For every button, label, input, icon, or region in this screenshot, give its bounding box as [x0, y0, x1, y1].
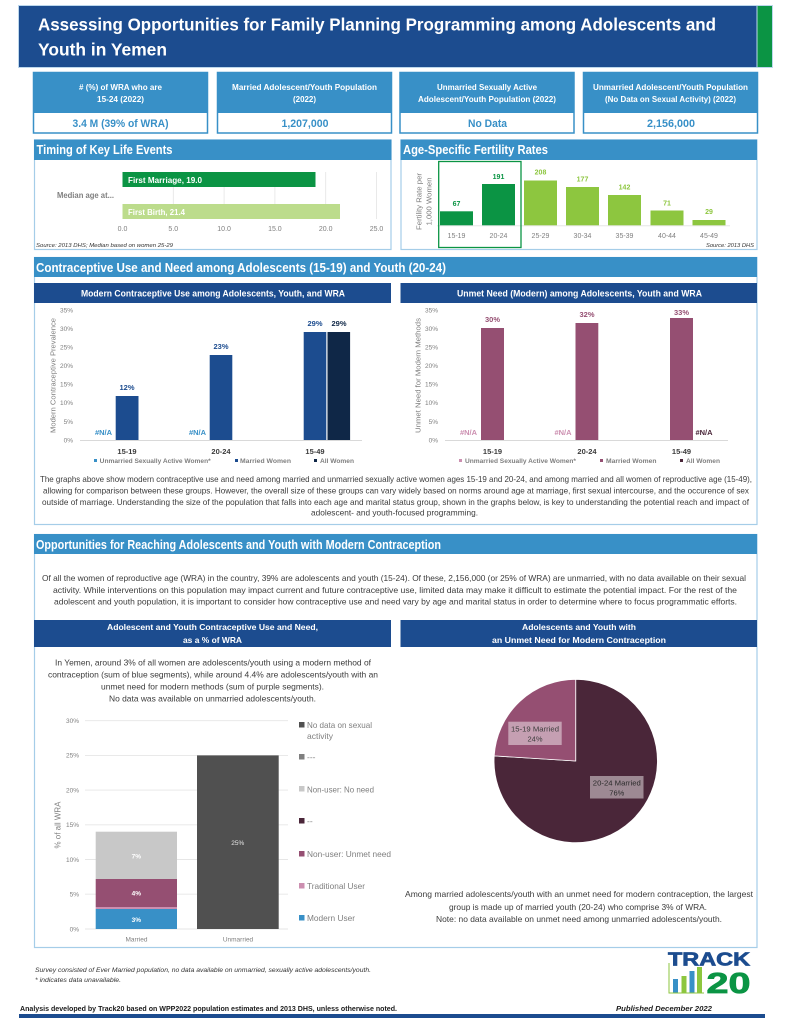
- stat card: unmarried sexually active population: [400, 72, 574, 133]
- bar chart: median ages: 25.0: [370, 226, 383, 233]
- bar chart: unmet need: 15-49: [672, 447, 691, 456]
- pie chart: unmet need by group: 15-19 Married: [511, 724, 559, 734]
- subheading: use and need as share of WRA: [34, 620, 391, 647]
- pie chart: unmet need by group: 20-24 Married: [593, 778, 641, 788]
- heading: opportunities: Opportunities for Reaching Adolescents and Youth with Modern Contraception: [36, 538, 441, 552]
- stat card: married population: (2022): [293, 95, 316, 104]
- stat card: WRA 15-24: 3.4 M (39% of WRA): [72, 118, 169, 130]
- text block: opportunities summary: activity. While interventions on this population may impact current and future contraceptive use, limited data may make it difficult to estimate the potential impact. For the rest of the: [53, 585, 737, 595]
- bar chart: unmet need: Unmet Need for Modern Methods: [414, 318, 422, 433]
- bar chart: modern contraceptive use: 5%: [64, 419, 73, 426]
- subheading: modern contraceptive use: [34, 283, 391, 303]
- stat card: WRA 15-24: [34, 72, 208, 133]
- bar chart: median ages: 15.0: [268, 226, 282, 233]
- bar chart: modern contraceptive use: 20%: [60, 363, 73, 370]
- stacked bar chart: share of WRA: 0%: [70, 926, 79, 933]
- bar chart: unmet need: 30%: [425, 326, 438, 333]
- legend: unmet need: Married Women: [606, 458, 657, 465]
- bar chart: modern contraceptive use: 10%: [60, 400, 73, 407]
- footer bar: [19, 1014, 765, 1018]
- text block: opportunities summary: adolescent and youth population, it is important to consider how contraceptive use and need vary by age and marital status in order to determine where to focus programmatic efforts.: [54, 596, 737, 606]
- stat card: unmarried population: [584, 72, 758, 133]
- bar chart: fertility rates: 208: [535, 170, 546, 176]
- title banner: Assessing Opportunities for Family Planning Programming among Adolescents and: [38, 14, 716, 34]
- bar chart: modern contraceptive use: 15-49: [305, 447, 325, 456]
- heading: age-specific fertility rates: Age-Specific Fertility Rates: [403, 143, 548, 157]
- legend: modern contraceptive use: Married Women: [240, 458, 291, 465]
- legend: modern contraceptive use: All Women: [320, 458, 354, 465]
- subheading: use and need as share of WRA: Adolescent and Youth Contraceptive Use and Need,: [107, 622, 318, 632]
- stat card: unmarried population: Unmarried Adolescent/Youth Population: [593, 83, 748, 92]
- subheading: unmet need groups: [400, 620, 757, 647]
- text block: stacked chart summary: No data was available on unmarried adolescents/youth.: [109, 694, 316, 704]
- source note: Source: 2013 DHS; Median based on women 25-29: [36, 243, 173, 249]
- logo: Track20: TRACK: [668, 950, 750, 970]
- text block: pie chart summary: [405, 889, 754, 924]
- stat card: unmarried population: 2,156,000: [647, 118, 695, 130]
- text block: stacked chart summary: unmet need for modern methods (sum of purple segments).: [101, 682, 324, 692]
- bar chart: fertility rates: 29: [705, 209, 713, 216]
- stat card: WRA 15-24: # (%) of WRA who are: [79, 83, 163, 92]
- bar chart: modern contraceptive use: 29%: [307, 319, 323, 328]
- bar chart: unmet need: 35%: [425, 308, 438, 314]
- bar chart: unmet need: #N/A: [554, 428, 572, 437]
- bar chart: fertility rates: 40-44: [658, 233, 676, 240]
- bar chart: fertility rates: Fertility Rate per: [414, 172, 424, 230]
- subheading: unmet need: [400, 283, 757, 303]
- stat card: unmarried sexually active population: Adolescent/Youth Population (2022): [418, 95, 556, 104]
- bar chart: fertility rates: 25-29: [532, 233, 550, 240]
- bar chart: modern contraceptive use: #N/A: [189, 428, 207, 437]
- heading: contraceptive use and need: Contraceptive Use and Need among Adolescents (15-19) and Youth (20-24): [36, 261, 446, 275]
- bar chart: modern contraceptive use: 15%: [60, 382, 73, 388]
- bar chart: modern contraceptive use: 20-24: [211, 447, 231, 456]
- bar chart: fertility rates: [414, 170, 730, 240]
- stat card: unmarried sexually active population: Unmarried Sexually Active: [437, 83, 538, 92]
- bar chart: modern contraceptive use: 35%: [60, 308, 73, 314]
- bar chart: median ages: 20.0: [319, 226, 333, 233]
- stat card: WRA 15-24: 15-24 (2022): [97, 95, 144, 104]
- legend: unmet need: [459, 458, 720, 465]
- pie chart: unmet need by group: 24%: [527, 734, 543, 744]
- bar chart: unmet need: 5%: [429, 419, 438, 426]
- bar chart: fertility rates: 45-49: [700, 233, 718, 240]
- bar chart: unmet need: #N/A: [460, 428, 478, 437]
- legend: unmet need: All Women: [686, 458, 720, 465]
- legend: stacked chart: --: [307, 816, 313, 826]
- panel: contraceptive use and need: [34, 257, 757, 524]
- bar chart: median ages: 10.0: [217, 226, 231, 233]
- bar chart: modern contraceptive use: 12%: [119, 383, 135, 392]
- footnotes: Survey consisted of Ever Married population, no data available on unmarried, sexually active adolescents/youth.: [35, 967, 371, 974]
- text block: graph explanation: allowing for comparison between these groups. However, the overall size of these groups can vary widely based on norms around age at marriage, first sexual intercourse, and the occurence of sex: [43, 486, 750, 496]
- subheading: use and need as share of WRA: as a % of WRA: [183, 635, 242, 645]
- logo: Track20: [668, 950, 750, 1000]
- bar chart: unmet need: 0%: [429, 438, 438, 444]
- text block: graph explanation: outside of marriage. Understanding the size of the population that falls into each age and marital status group, shown in the graphs below, is key to understanding the potential reach and impact of: [42, 497, 750, 507]
- bar chart: fertility rates: 1,000 Women: [424, 178, 434, 226]
- stat card: unmarried sexually active population: No Data: [468, 118, 508, 130]
- text block: graph explanation: The graphs above show modern contraceptive use and need among married and unmarried sexually active women ages 15-19 and 20-24, and among married and all women of reproductive age (15-49),: [40, 474, 752, 484]
- legend: modern contraceptive use: Unmarried Sexually Active Women*: [100, 458, 211, 465]
- stat card: unmarried population: (No Data on Sexual Activity) (2022): [605, 95, 736, 104]
- stacked bar chart: share of WRA: 4%: [132, 890, 141, 898]
- bar chart: modern contraceptive use: 15-19: [117, 447, 137, 456]
- bar chart: unmet need: 25%: [425, 344, 438, 352]
- highlight box: ages 15-24: [439, 162, 521, 248]
- text block: pie chart summary: Note: no data available on unmet need among unmarried adolescents/youth.: [436, 914, 722, 924]
- stat card: married population: 1,207,000: [282, 118, 328, 130]
- bar chart: modern contraceptive use: 23%: [213, 342, 229, 351]
- legend: stacked chart: Non-user: Unmet need: [307, 849, 391, 859]
- legend: stacked chart: activity: [307, 731, 334, 741]
- stacked bar chart: share of WRA: 10%: [66, 857, 79, 864]
- text block: opportunities summary: Of all the women of reproductive age (WRA) in the country, 39% are adolescents and youth (15-24). Of these, 2,156,000 (or 25% of WRA) are unmarried, with no data available on their sexual: [42, 573, 746, 583]
- heading: timing of key life events: Timing of Key Life Events: [36, 143, 173, 157]
- stat card: married population: [218, 72, 392, 133]
- subheading: unmet need groups: Adolescents and Youth with: [522, 622, 636, 632]
- panel: age-specific fertility rates: [400, 140, 757, 250]
- subheading: unmet need: Unmet Need (Modern) among Adolescents, Youth and WRA: [457, 288, 702, 298]
- bar chart: unmet need: 20-24: [577, 447, 597, 456]
- legend: stacked chart: Non-user: No need: [307, 784, 374, 794]
- bar chart: fertility rates: 35-39: [616, 233, 634, 240]
- source note: Source: 2013 DHS: [706, 243, 754, 249]
- legend: stacked chart: ---: [307, 752, 316, 762]
- bar chart: fertility rates: 191: [493, 174, 504, 181]
- bar chart: unmet need: 33%: [674, 308, 689, 317]
- bar chart: unmet need: 20%: [425, 363, 438, 370]
- panel: timing of key life events: [34, 140, 392, 250]
- legend: stacked chart: [299, 720, 391, 923]
- text block: pie chart summary: group is made up of married youth (20-24) who comprise 3% of WRA.: [449, 902, 707, 912]
- bar chart: median ages: First Marriage, 19.0: [128, 176, 203, 185]
- bar chart: fertility rates: 67: [453, 201, 460, 208]
- stacked bar chart: share of WRA: [54, 718, 288, 944]
- bar chart: fertility rates: 142: [619, 184, 630, 192]
- stacked bar chart: share of WRA: 30%: [66, 718, 79, 725]
- legend: stacked chart: Modern User: [307, 913, 355, 923]
- bar chart: fertility rates: 15-19: [448, 233, 466, 240]
- bar chart: unmet need: [414, 308, 728, 456]
- bar chart: fertility rates: 30-34: [574, 233, 592, 240]
- stacked bar chart: share of WRA: 15%: [66, 822, 79, 829]
- bar chart: modern contraceptive use: 29%: [331, 319, 347, 328]
- stacked bar chart: share of WRA: Unmarried: [223, 936, 254, 944]
- bar chart: unmet need: 10%: [425, 400, 438, 407]
- footnotes: * indicates data unavailable.: [35, 977, 121, 984]
- attribution line: Analysis developed by Track20 based on WPP2022 population estimates and 2013 DHS, unless otherwise noted.: [20, 1004, 397, 1013]
- bar chart: modern contraceptive use: 25%: [60, 344, 73, 352]
- bar chart: median ages: Median age at...: [57, 191, 114, 200]
- bar chart: fertility rates: 177: [577, 176, 588, 184]
- stacked bar chart: share of WRA: 3%: [132, 917, 141, 924]
- subheading: unmet need groups: an Unmet Need for Modern Contraception: [492, 635, 666, 645]
- footnotes: [35, 967, 371, 984]
- bar chart: median ages: [57, 172, 383, 233]
- text block: stacked chart summary: [48, 658, 378, 704]
- bar chart: modern contraceptive use: [48, 308, 362, 456]
- title banner: [18, 6, 772, 68]
- bar chart: median ages: 5.0: [168, 226, 178, 233]
- bar chart: modern contraceptive use: Modern Contraceptive Prevalence: [48, 318, 58, 433]
- text block: opportunities summary: [42, 573, 746, 606]
- panel: opportunities for reaching adolescents and youth: [34, 534, 757, 948]
- text block: stacked chart summary: In Yemen, around 3% of all women are adolescents/youth using a modern method of: [55, 658, 372, 668]
- stacked bar chart: share of WRA: Married: [125, 936, 148, 944]
- bar chart: modern contraceptive use: 0%: [64, 438, 73, 444]
- text block: graph explanation: adolescent- and youth-focused programming.: [311, 508, 478, 518]
- publication date: Published December 2022: [616, 1004, 713, 1013]
- bar chart: unmet need: 15-19: [483, 447, 502, 456]
- stacked bar chart: share of WRA: 25%: [66, 753, 79, 760]
- bar chart: modern contraceptive use: #N/A: [95, 428, 113, 437]
- bar chart: unmet need: 30%: [485, 315, 500, 324]
- legend: unmet need: Unmarried Sexually Active Women*: [465, 458, 576, 465]
- pie chart: unmet need by group: [494, 679, 657, 843]
- pie chart: unmet need by group: 76%: [609, 788, 625, 798]
- title banner: Youth in Yemen: [38, 40, 167, 60]
- stacked bar chart: share of WRA: % of all WRA: [54, 801, 62, 848]
- bar chart: unmet need: 15%: [425, 382, 438, 388]
- stat card: married population: Married Adolescent/Youth Population: [232, 83, 377, 92]
- text block: graph explanation: [40, 474, 752, 518]
- text block: pie chart summary: Among married adolescents/youth with an unmet need for modern contraception, the largest: [405, 889, 754, 899]
- stacked bar chart: share of WRA: 7%: [132, 854, 141, 860]
- stacked bar chart: share of WRA: 20%: [66, 787, 79, 794]
- bar chart: modern contraceptive use: 30%: [60, 326, 73, 333]
- bar chart: unmet need: #N/A: [695, 428, 713, 437]
- legend: modern contraceptive use: [94, 458, 354, 465]
- bar chart: fertility rates: 20-24: [490, 233, 508, 240]
- text block: stacked chart summary: contraception (sum of blue segments), while around 4.4% are adolescents/youth with an: [48, 670, 378, 680]
- legend: stacked chart: Traditional User: [307, 881, 365, 891]
- bar chart: median ages: First Birth, 21.4: [128, 208, 186, 217]
- subheading: modern contraceptive use: Modern Contraceptive Use among Adolescents, Youth, and WRA: [81, 288, 345, 298]
- stacked bar chart: share of WRA: 5%: [70, 892, 79, 898]
- bar chart: unmet need: 32%: [579, 310, 595, 319]
- bar chart: fertility rates: 71: [663, 200, 671, 208]
- logo: Track20: 20: [706, 968, 750, 1000]
- stacked bar chart: share of WRA: 25%: [231, 840, 245, 847]
- bar chart: median ages: 0.0: [118, 226, 127, 233]
- legend: stacked chart: No data on sexual: [307, 720, 372, 730]
